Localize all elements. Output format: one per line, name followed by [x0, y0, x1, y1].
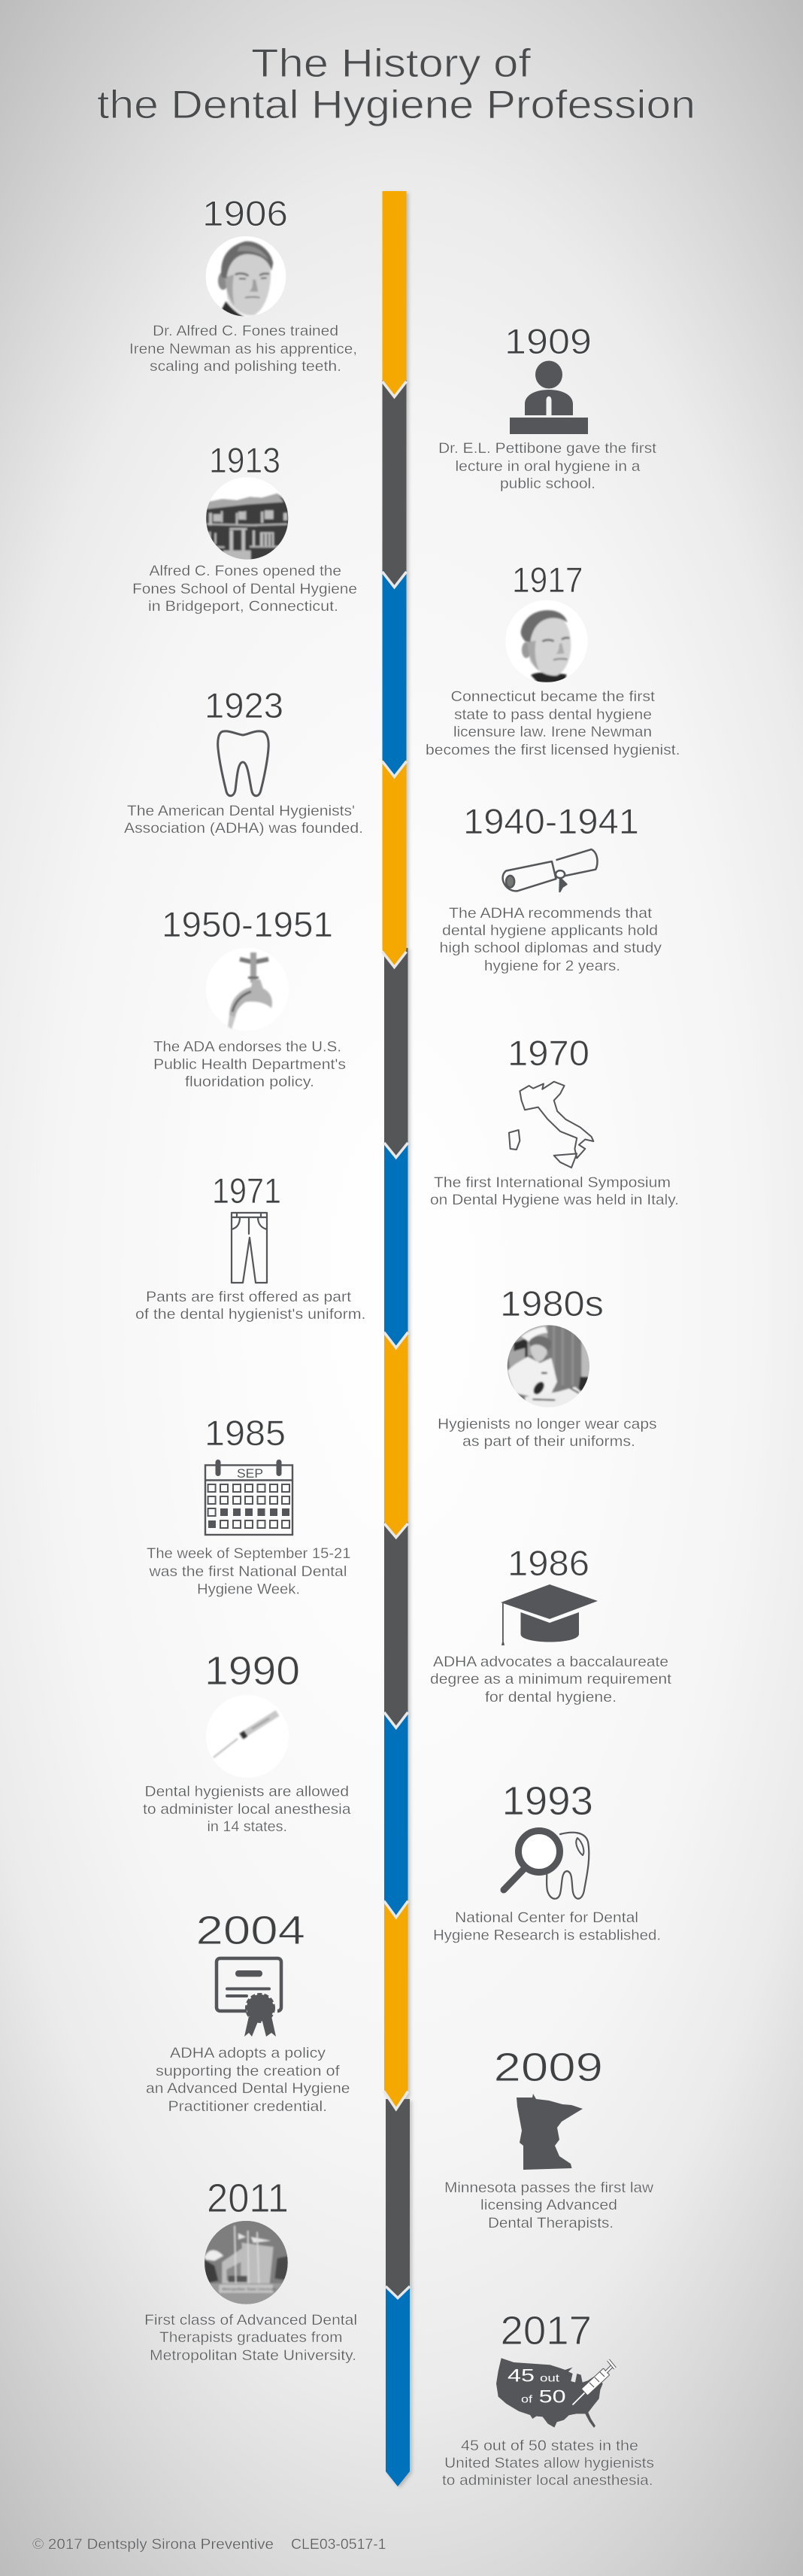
photo: water faucet	[206, 948, 289, 1031]
description 1970: on Dental Hygiene was held in Italy.	[430, 1192, 679, 1208]
year 1990: 1990	[205, 1648, 300, 1694]
event: 1909	[438, 321, 657, 492]
year 1906: 1906	[202, 193, 288, 233]
description 1909	[438, 440, 657, 492]
year 1913: 1913	[209, 440, 280, 480]
event: 1917	[426, 560, 680, 758]
event: 1923	[124, 685, 363, 837]
description 2004: ADHA adopts a policy	[170, 2045, 326, 2061]
event: 1950-1951	[153, 904, 346, 1090]
description 1990	[143, 1783, 351, 1835]
description 1980s: as part of their uniforms.	[462, 1433, 635, 1450]
description 2011	[144, 2312, 357, 2364]
icon: diploma scroll	[503, 849, 597, 892]
event: 1986	[430, 1543, 672, 1706]
description 1913: Alfred C. Fones opened the	[149, 563, 341, 579]
description 1909: Dr. E.L. Pettibone gave the first	[438, 440, 657, 457]
description 1913: in Bridgeport, Connecticut.	[148, 598, 338, 615]
year 1993: 1993	[502, 1779, 593, 1824]
event: 1985	[147, 1413, 350, 1598]
description 1950-1951: Public Health Department's	[153, 1056, 346, 1073]
description 2011: First class of Advanced Dental	[144, 2312, 357, 2328]
description 1985: The week of September 15-21	[147, 1545, 350, 1562]
photo: Metropolitan State University	[202, 2219, 289, 2307]
icon: map of Minnesota	[517, 2094, 583, 2170]
description 1986: for dental hygiene.	[485, 1689, 617, 1706]
description 1923: The American Dental Hygienists'	[127, 803, 355, 819]
year 2009: 2009	[493, 2045, 603, 2090]
photo: Metropolitan State University: Metropolitan State University	[222, 2287, 277, 2292]
event: 2011	[144, 2176, 357, 2364]
description 2009: Dental Therapists.	[488, 2215, 614, 2231]
title: The History of	[251, 41, 531, 86]
event: 1906	[129, 193, 357, 375]
description 1985: Hygiene Week.	[197, 1581, 300, 1598]
icon: certificate with seal	[217, 1958, 281, 2037]
year 1950-1951: 1950-1951	[162, 904, 333, 944]
event: 2009	[444, 2045, 654, 2231]
icon: speaker at podium	[510, 361, 588, 434]
description 1990: in 14 states.	[208, 1818, 287, 1835]
description 1917: Connecticut became the first	[451, 688, 656, 705]
icon: graduation cap	[501, 1584, 598, 1645]
description 1993	[433, 1909, 661, 1944]
footer copyright: CLE03-0517-1	[291, 2537, 386, 2553]
description 1940-1941: hygiene for 2 years.	[484, 958, 620, 974]
photo: hygienist in uniform	[507, 1325, 589, 1407]
icon: US map with syringe: out	[540, 2372, 559, 2384]
description 1986	[430, 1654, 672, 1706]
description 2017: 45 out of 50 states in the	[461, 2438, 638, 2454]
footer copyright	[32, 2537, 386, 2553]
photo: Dr. Alfred Fones portrait	[206, 236, 286, 317]
event: 1971	[135, 1171, 365, 1323]
icon: September calendar: SEP	[237, 1466, 263, 1481]
description 1985	[147, 1545, 350, 1598]
icon: tooth	[218, 731, 268, 796]
description 1917	[426, 688, 680, 758]
description 1909: lecture in oral hygiene in a	[456, 458, 641, 475]
description 2011: Metropolitan State University.	[150, 2347, 356, 2364]
photo: syringe	[206, 1695, 289, 1778]
description 2011: Therapists graduates from	[159, 2329, 343, 2346]
event: 1940-1941	[439, 801, 662, 974]
year 1940-1941: 1940-1941	[463, 801, 639, 841]
year 1985: 1985	[205, 1413, 286, 1453]
icon: US map with syringe: of	[521, 2392, 532, 2404]
icon: US map with syringe: 45	[508, 2366, 535, 2386]
icon: map of Italy	[509, 1082, 593, 1168]
description 1990: Dental hygienists are allowed	[144, 1783, 349, 1800]
description 2017: to administer local anesthesia.	[442, 2472, 653, 2489]
year 2017: 2017	[501, 2308, 592, 2353]
description 1970	[430, 1174, 679, 1208]
syringe	[573, 2360, 615, 2404]
description 1971	[135, 1289, 365, 1323]
description 1940-1941	[439, 905, 662, 974]
year 1923: 1923	[205, 685, 283, 725]
description 1950-1951: The ADA endorses the U.S.	[153, 1038, 341, 1055]
title: the Dental Hygiene Profession	[97, 83, 695, 127]
year 2004: 2004	[195, 1908, 305, 1953]
event: 2017	[442, 2308, 654, 2489]
description 2017: United States allow hygienists	[444, 2455, 654, 2471]
year 1917: 1917	[512, 560, 583, 600]
timeline bar	[382, 191, 410, 2486]
description 1917: licensure law. Irene Newman	[453, 724, 652, 740]
description 1940-1941: The ADHA recommends that	[449, 905, 653, 922]
description 1971: Pants are first offered as part	[146, 1289, 352, 1305]
description 2004: an Advanced Dental Hygiene	[146, 2080, 350, 2097]
year 1970: 1970	[508, 1033, 589, 1073]
description 1985: was the first National Dental	[148, 1563, 347, 1580]
description 1986: degree as a minimum requirement	[430, 1671, 672, 1687]
year 2011: 2011	[207, 2176, 289, 2221]
description 1909: public school.	[500, 475, 595, 492]
icon: September calendar	[205, 1460, 292, 1535]
description 1940-1941: dental hygiene applicants hold	[442, 922, 658, 939]
icon: magnifier over tooth	[504, 1831, 589, 1899]
photo: Irene Newman portrait	[505, 600, 588, 682]
description 1950-1951	[153, 1038, 346, 1090]
description 1917: state to pass dental hygiene	[454, 706, 652, 723]
description 2009: Minnesota passes the first law	[444, 2180, 654, 2196]
description 1906: scaling and polishing teeth.	[150, 358, 341, 375]
event: 1980s	[438, 1283, 657, 1450]
event: 1993	[433, 1779, 661, 1944]
description 2009	[444, 2180, 654, 2231]
year 1986: 1986	[508, 1543, 589, 1583]
description 1986: ADHA advocates a baccalaureate	[433, 1654, 668, 1670]
year 1971: 1971	[212, 1171, 281, 1211]
description 1906	[129, 323, 357, 375]
description 1906: Irene Newman as his apprentice,	[129, 341, 357, 357]
event: 1913	[132, 440, 357, 615]
description 1940-1941: high school diplomas and study	[439, 940, 662, 956]
description 1906: Dr. Alfred C. Fones trained	[153, 323, 338, 339]
description 2017	[442, 2438, 654, 2489]
title	[97, 41, 695, 127]
description 1971: of the dental hygienist's uniform.	[135, 1306, 365, 1323]
description 1913	[132, 563, 357, 615]
description 1993: Hygiene Research is established.	[433, 1927, 661, 1944]
description 1993: National Center for Dental	[455, 1909, 638, 1926]
icon: US map with syringe: 50	[539, 2386, 566, 2407]
year 1980s: 1980s	[500, 1283, 604, 1323]
description 1970: The first International Symposium	[434, 1174, 671, 1191]
description 1980s: Hygienists no longer wear caps	[438, 1416, 657, 1432]
description 1980s	[438, 1416, 657, 1450]
description 2004	[146, 2045, 350, 2115]
icon: pants	[232, 1213, 267, 1283]
description 1990: to administer local anesthesia	[143, 1801, 351, 1818]
description 1950-1951: fluoridation policy.	[185, 1074, 314, 1090]
description 2004: supporting the creation of	[156, 2063, 340, 2079]
description 1913: Fones School of Dental Hygiene	[132, 581, 357, 597]
description 1917: becomes the first licensed hygienist.	[426, 742, 680, 758]
icon: US map with syringe	[496, 2358, 615, 2428]
description 1923: Association (ADHA) was founded.	[124, 820, 363, 837]
description 2004: Practitioner credential.	[168, 2098, 327, 2115]
event: 1970	[430, 1033, 679, 1208]
year 1909: 1909	[505, 321, 592, 361]
photo: Fones School building	[206, 477, 289, 562]
event: 1990	[143, 1648, 351, 1835]
event: 2004	[146, 1908, 350, 2115]
footer copyright: © 2017 Dentsply Sirona Preventive	[32, 2537, 274, 2553]
description 2009: licensing Advanced	[480, 2197, 617, 2213]
description 1923	[124, 803, 363, 837]
